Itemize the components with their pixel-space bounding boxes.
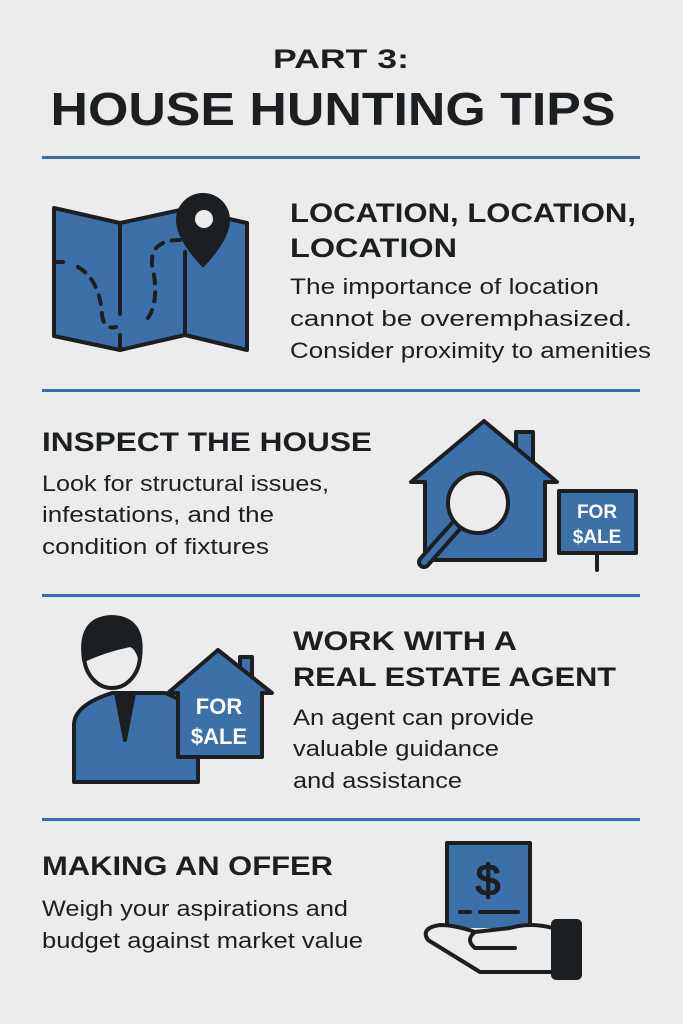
panel: inspect <box>42 421 636 570</box>
heading: MAKING AN OFFER <box>42 851 333 881</box>
text block: An agent can provide <box>293 705 534 730</box>
text block: Weigh your aspirations and <box>42 896 348 921</box>
panel: location: LOCATION <box>290 233 457 263</box>
text block: The importance of location <box>290 274 599 299</box>
text block: infestations, and the <box>42 502 274 527</box>
text block <box>42 896 363 953</box>
panel: agent: REAL ESTATE AGENT <box>293 662 617 692</box>
icon: hand holding money: $ <box>476 856 500 905</box>
text block <box>42 471 329 559</box>
text block: condition of fixtures <box>42 534 269 559</box>
heading: INSPECT THE HOUSE <box>42 427 372 457</box>
title: HOUSE HUNTING TIPS <box>50 83 616 135</box>
title <box>50 44 616 135</box>
text block <box>293 705 534 793</box>
text block: Look for structural issues, <box>42 471 329 496</box>
heading: LOCATION, LOCATION, <box>290 198 636 228</box>
icon: hand holding money <box>426 843 580 978</box>
text block: Consider proximity to amenities <box>290 338 651 363</box>
text block <box>290 274 651 363</box>
icon: agent with house <box>74 617 272 782</box>
panel: location <box>54 195 651 363</box>
text block: and assistance <box>293 768 462 793</box>
panel: inspect: FOR <box>577 502 617 523</box>
heading: WORK WITH A <box>293 626 517 656</box>
icon: map with pin <box>54 195 247 350</box>
panel: agent <box>74 617 617 793</box>
panel: agent: $ALE <box>191 724 247 749</box>
panel: offer <box>42 843 580 978</box>
panel: inspect: $ALE <box>573 527 621 548</box>
text block: cannot be overemphasized. <box>290 306 632 331</box>
title: PART 3: <box>273 44 409 74</box>
text block: budget against market value <box>42 928 363 953</box>
text block: valuable guidance <box>293 736 499 761</box>
panel: agent: FOR <box>196 694 242 719</box>
icon: house with magnifier and sign <box>411 421 636 570</box>
